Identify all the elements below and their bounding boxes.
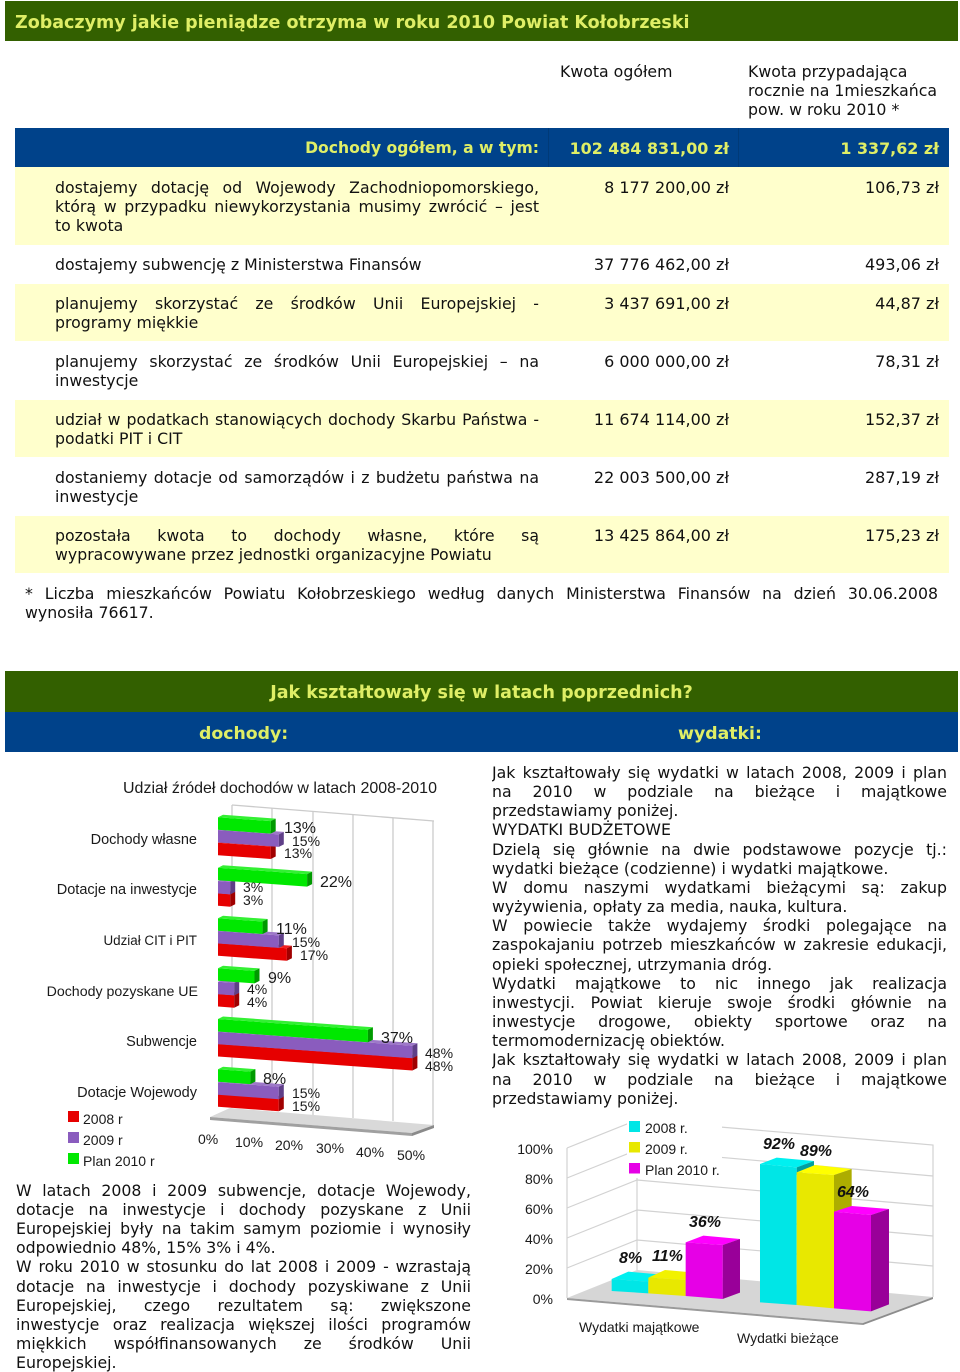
subheading band: dochody / wydatki: wydatki:: [678, 724, 762, 744]
x axis labels: 50%: [397, 1147, 425, 1163]
total row: 1 337,62 zł: [840, 138, 939, 158]
row: inwestycje UE: planujemy skorzystać ze środków Unii Europejskiej – na: [55, 352, 539, 371]
legend: Plan 2010 r: [83, 1153, 155, 1169]
text block: wydatki: inwestycje drogowe, obiekty sportowe oraz na: [492, 1012, 947, 1031]
category labels: Dochody własne: [91, 832, 197, 848]
row: inwestycje UE: inwestycje: [55, 371, 138, 390]
category labels: Wydatki bieżące: [737, 1330, 839, 1346]
row: inwestycje UE: [55, 352, 939, 390]
y axis labels: 80%: [525, 1171, 553, 1187]
text block: wydatki: przedstawiamy poniżej.: [492, 801, 678, 820]
row: subwencja: 37 776 462,00 zł: [594, 255, 729, 274]
x axis labels: 20%: [275, 1137, 303, 1153]
text block: dochody: [16, 1181, 471, 1372]
section heading band: [5, 671, 958, 712]
text block: wydatki: Wydatki majątkowe to nic innego jak realizacja: [492, 974, 947, 993]
row: dotacje od samorządów: [55, 468, 939, 506]
row: PIT i CIT: 152,37 zł: [865, 410, 939, 429]
text block: dochody: W roku 2010 w stosunku do lat 2008 i 2009 - wzrastają: [16, 1257, 471, 1276]
row: programy miękkie: programy miękkie: [55, 313, 198, 332]
back wall grid: [232, 805, 434, 1125]
category labels: Dotacje na inwestycje: [57, 882, 197, 898]
value labels: 4%: [247, 981, 267, 997]
value labels: [619, 1136, 869, 1267]
bars: Subwencje: [218, 1016, 417, 1070]
row: dotacje od samorządów: 22 003 500,00 zł: [594, 468, 729, 487]
text block: dochody: dotacje na inwestycje i dochody pozyskane z Unii: [16, 1200, 471, 1219]
row: dotacja Wojewody: [55, 178, 939, 235]
category labels: [579, 1319, 839, 1346]
chart: income sources: [47, 780, 453, 1169]
x axis labels: 30%: [316, 1140, 344, 1156]
value labels: 92%: [763, 1136, 795, 1153]
text block: wydatki: W powiecie także wydajemy środki polegające na: [492, 916, 947, 935]
y axis labels: 20%: [525, 1261, 553, 1277]
row: programy miękkie: [55, 294, 939, 332]
text block: wydatki: inwestycji. Powiat kieruje swoje środki głównie na: [492, 993, 947, 1012]
footnote: wynosiła 76617.: [25, 603, 154, 622]
text block: wydatki: W domu naszymi wydatkami bieżącymi są: zakup: [492, 878, 947, 897]
x axis labels: 10%: [235, 1134, 263, 1150]
bars: Dotacje na inwestycje: [218, 865, 312, 907]
text block: wydatki: wyżywienia, opłaty za media, nauka, kultura.: [492, 897, 847, 916]
bars: [612, 1158, 889, 1311]
value labels: 8%: [263, 1071, 286, 1088]
title band: [5, 1, 958, 41]
row: subwencja: 493,06 zł: [865, 255, 939, 274]
text block: wydatki: termomodernizację obiektów.: [492, 1031, 725, 1050]
bars: Dochody własne: [218, 815, 284, 859]
value labels: 64%: [837, 1184, 869, 1201]
floor: [210, 1108, 434, 1136]
table: income sources: [15, 128, 949, 573]
value labels: 17%: [300, 947, 328, 963]
subheading band: dochody / wydatki: [5, 712, 958, 752]
bars: Dotacje Wojewody: [218, 1067, 284, 1111]
value labels: 89%: [800, 1143, 832, 1160]
chart title: Udział źródeł dochodów w latach 2008-2010: [123, 780, 437, 797]
row: PIT i CIT: udział w podatkach stanowiących dochody Skarbu Państwa -: [55, 410, 539, 429]
bars: Wydatki bieżące: [760, 1158, 889, 1311]
row: dotacja Wojewody: którą w przypadku niewykorzystania musimy zwrócić – jest: [55, 197, 539, 216]
row: programy miękkie: 3 437 691,00 zł: [604, 294, 729, 313]
x axis labels: 0%: [198, 1131, 218, 1147]
walls and grid: [567, 1120, 933, 1298]
chart: expenditure: [517, 1119, 933, 1346]
y axis labels: 60%: [525, 1201, 553, 1217]
value labels: 48%: [425, 1045, 453, 1061]
y axis labels: 100%: [517, 1141, 553, 1157]
text block: wydatki: [492, 763, 947, 1108]
value labels: 8%: [619, 1250, 642, 1267]
total row: Dochody ogółem, a w tym:: [305, 139, 539, 157]
value labels: 15%: [292, 1098, 320, 1114]
row: subwencja: dostajemy subwencję z Ministerstwa Finansów: [55, 255, 422, 274]
category labels: Dotacje Wojewody: [77, 1085, 198, 1101]
category labels: Subwencje: [126, 1034, 197, 1050]
row: dochody własne: wypracowywane przez jednostki organizacyjne Powiatu: [55, 545, 492, 564]
text block: dochody: odpowiednio 48%, 15% 3% i 4%.: [16, 1238, 276, 1257]
text block: dochody: Europejskiej.: [16, 1353, 117, 1372]
value labels: 3%: [243, 879, 263, 895]
value labels: 13%: [284, 820, 316, 837]
title band: Zobaczymy jakie pieniądze otrzyma w roku 2010 Powiat Kołobrzeski: [15, 13, 689, 33]
row: PIT i CIT: 11 674 114,00 zł: [594, 410, 729, 429]
text block: wydatki: Dzielą się głównie na dwie podstawowe pozycje tj.:: [492, 840, 947, 859]
text block: wydatki: opieki społecznej, utrzymania dróg.: [492, 955, 772, 974]
legend: [68, 1111, 155, 1169]
value labels: 48%: [425, 1058, 453, 1074]
yellow row backgrounds: [15, 167, 949, 573]
row: inwestycje UE: 78,31 zł: [875, 352, 939, 371]
value labels: 22%: [320, 874, 352, 891]
value labels: 3%: [243, 892, 263, 908]
row: dotacje od samorządów: dostaniemy dotacje od samorządów i z budżetu państwa na: [55, 468, 539, 487]
category labels: [47, 832, 198, 1101]
x axis labels: 40%: [356, 1144, 384, 1160]
text block: wydatki: WYDATKI BUDŻETOWE: [492, 820, 671, 839]
row: subwencja: [55, 255, 939, 274]
floor: [567, 1270, 933, 1325]
value labels: 13%: [284, 845, 312, 861]
footnote: [25, 584, 938, 622]
text block: dochody: miękkich współfinansowanych ze środków Unii: [16, 1334, 471, 1353]
value labels: 15%: [292, 833, 320, 849]
legend: Plan 2010 r.: [645, 1162, 720, 1178]
text block: dochody: W latach 2008 i 2009 subwencje, dotacje Wojewody,: [16, 1181, 471, 1200]
table column headers: [560, 62, 937, 119]
value labels: 15%: [292, 1085, 320, 1101]
text block: dochody: Europejskiej były na takim samym poziomie i wynosiły: [16, 1219, 471, 1238]
total row: 102 484 831,00 zł: [570, 138, 729, 158]
value labels: 9%: [268, 970, 291, 987]
category labels: Dochody pozyskane UE: [47, 984, 198, 1000]
row: dochody własne: [55, 526, 939, 564]
subheading band: dochody / wydatki: dochody:: [199, 724, 288, 744]
legend: 2009 r.: [645, 1141, 688, 1157]
y axis labels: [517, 1141, 553, 1307]
footnote: * Liczba mieszkańców Powiatu Kołobrzeskiego według danych Ministerstwa Finansów na dzień 30.06.2008: [25, 584, 938, 603]
x axis labels: [198, 1131, 425, 1163]
row: dotacje od samorządów: inwestycje: [55, 487, 138, 506]
row: dochody własne: 13 425 864,00 zł: [594, 526, 729, 545]
text block: wydatki: zaspokajaniu potrzeb mieszkańców w zakresie edukacji,: [492, 935, 947, 954]
legend: 2008 r: [83, 1111, 123, 1127]
table column headers: Kwota ogółem: [560, 62, 672, 81]
text block: wydatki: Jak kształtowały się wydatki w latach 2008, 2009 i plan: [492, 1050, 947, 1069]
value labels: 11%: [652, 1248, 683, 1265]
text block: wydatki: Jak kształtowały się wydatki w latach 2008, 2009 i plan: [492, 763, 947, 782]
row: dochody własne: pozostała kwota to dochody własne, które są: [55, 526, 539, 545]
legend: 2008 r.: [645, 1120, 688, 1136]
bars: Udział CIT i PIT: [218, 916, 292, 961]
category labels: Wydatki majątkowe: [579, 1319, 700, 1335]
table column headers: Kwota przypadająca: [748, 62, 907, 81]
row: PIT i CIT: podatki PIT i CIT: [55, 429, 182, 448]
value labels: 37%: [381, 1030, 413, 1047]
bars: Wydatki majątkowe: [612, 1236, 740, 1299]
row: programy miękkie: planujemy skorzystać ze środków Unii Europejskiej -: [55, 294, 539, 313]
section heading band: Jak kształtowały się w latach poprzednich?: [270, 683, 693, 703]
y axis labels: 0%: [533, 1291, 553, 1307]
table column headers: pow. w roku 2010 *: [748, 100, 899, 119]
row: PIT i CIT: [55, 410, 939, 448]
table column headers: rocznie na 1mieszkańca: [748, 81, 937, 100]
text block: wydatki: na 2010 w podziale na bieżące i majątkowe: [492, 782, 947, 801]
bars: Dochody pozyskane UE: [218, 966, 260, 1008]
row: dotacja Wojewody: 106,73 zł: [865, 178, 939, 197]
text block: wydatki: przedstawiamy poniżej.: [492, 1089, 678, 1108]
value labels: 11%: [276, 921, 307, 938]
y axis labels: 40%: [525, 1231, 553, 1247]
row: dochody własne: 175,23 zł: [865, 526, 939, 545]
value labels: 36%: [689, 1214, 721, 1231]
text block: dochody: inwestycje oraz realizacja większej ilości programów: [16, 1315, 471, 1334]
row: dotacja Wojewody: to kwota: [55, 216, 123, 235]
value labels: [243, 820, 453, 1114]
category labels: Udział CIT i PIT: [103, 933, 197, 948]
legend: [627, 1119, 722, 1178]
row: dotacje od samorządów: 287,19 zł: [865, 468, 939, 487]
row: dotacja Wojewody: 8 177 200,00 zł: [604, 178, 729, 197]
value labels: 15%: [292, 934, 320, 950]
text block: dochody: dotacje na inwestycje i dochody pozyskiwane z Unii: [16, 1277, 471, 1296]
text block: wydatki: na 2010 w podziale na bieżące i majątkowe: [492, 1070, 947, 1089]
text block: dochody: Europejskiej, czego rezultatem są: zwiększone: [16, 1296, 471, 1315]
text block: wydatki: wydatki bieżące (codzienne) i wydatki majątkowe.: [492, 859, 888, 878]
row: programy miękkie: 44,87 zł: [875, 294, 939, 313]
row: inwestycje UE: 6 000 000,00 zł: [604, 352, 729, 371]
row: dotacja Wojewody: dostajemy dotację od Wojewody Zachodniopomorskiego,: [55, 178, 539, 197]
legend: 2009 r: [83, 1132, 123, 1148]
total row: [15, 128, 949, 167]
value labels: 4%: [247, 994, 267, 1010]
